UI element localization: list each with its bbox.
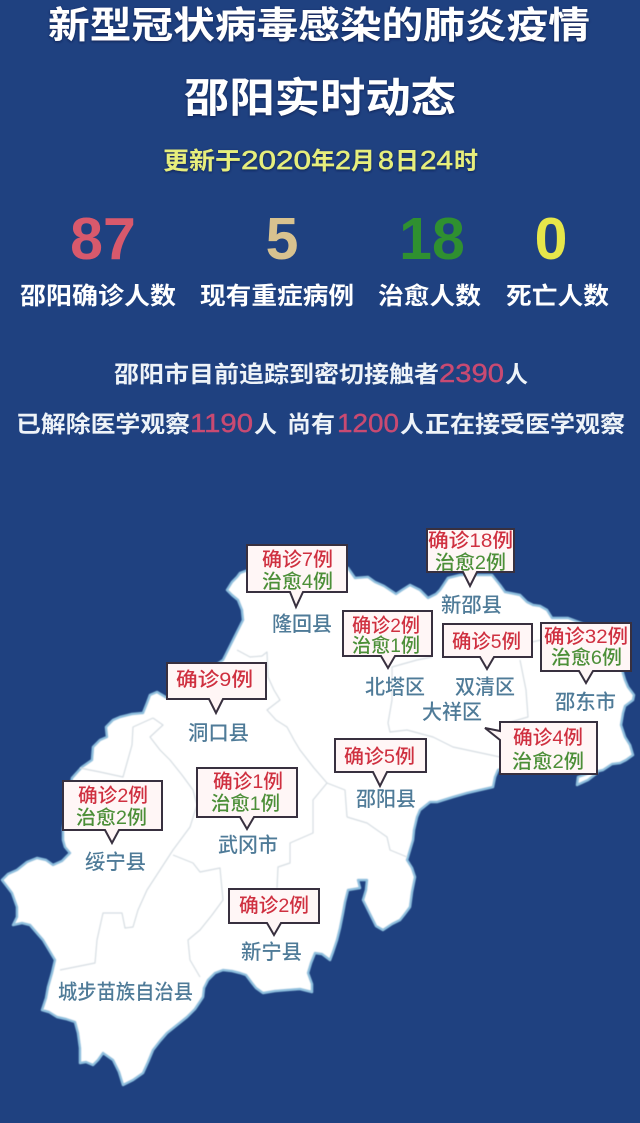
statistics row xyxy=(20,206,609,310)
place: Wugang: 武冈市 xyxy=(218,834,278,857)
update time: 2 xyxy=(335,145,351,175)
callout: Wugang xyxy=(197,768,297,829)
callout: Suining xyxy=(63,781,162,843)
callout: Longhui xyxy=(247,545,347,607)
stat: cured: 18 xyxy=(399,206,465,272)
update time xyxy=(163,145,478,175)
stat: confirmed xyxy=(20,206,176,310)
stat: severe: 5 xyxy=(266,206,298,272)
callout: Suining: 治愈2例 xyxy=(76,807,147,829)
stat: confirmed: 邵阳确诊人数 xyxy=(20,283,176,310)
callout: Xinning xyxy=(229,889,319,935)
contacts line 2: 1190 xyxy=(190,408,253,438)
callout: Xinshao: 治愈2例 xyxy=(435,552,506,574)
callout: Dongkou xyxy=(167,663,266,713)
stat: deaths: 0 xyxy=(535,206,567,272)
contacts line 2 xyxy=(16,408,625,438)
contacts line 2: 人 xyxy=(400,411,424,437)
callout: Shaoyang county: 确诊5例 xyxy=(344,746,415,768)
place: Dongkou: 洞口县 xyxy=(188,722,249,745)
callout: Xinning: 确诊2例 xyxy=(239,895,309,917)
callout: Shaodong xyxy=(541,623,631,683)
callout: Xinshao xyxy=(427,529,514,586)
callout: Suining: 确诊2例 xyxy=(78,785,148,807)
contacts line 1 xyxy=(114,358,528,388)
place: Shuangqing: 双清区 xyxy=(455,676,515,699)
place: Beita: 北塔区 xyxy=(365,676,425,699)
place: Longhui: 隆回县 xyxy=(272,613,332,636)
map of Shaoyang xyxy=(2,529,634,1085)
close contacts text xyxy=(16,358,625,438)
map outline xyxy=(2,565,634,1085)
callout: Daxiang xyxy=(485,722,597,774)
callout: Shuangqing xyxy=(443,624,532,669)
place: Xinning: 新宁县 xyxy=(241,941,302,964)
header text block xyxy=(48,5,590,175)
title line 2: 邵阳实时动态 xyxy=(184,75,456,121)
callout: Longhui: 治愈4例 xyxy=(262,571,333,593)
contacts line 1: 2390 xyxy=(439,358,504,388)
place: Xinshao: 新邵县 xyxy=(441,594,502,617)
stat: cured xyxy=(378,206,481,310)
callout: Daxiang: 治愈2例 xyxy=(512,751,584,773)
stat: severe: 现有重症病例 xyxy=(200,283,354,310)
update time: 8 xyxy=(378,145,394,175)
update time: 月 xyxy=(351,148,375,175)
callout: Shaodong: 治愈6例 xyxy=(551,647,622,669)
contacts line 1: 人 xyxy=(505,361,528,387)
stat: deaths: 死亡人数 xyxy=(506,283,609,310)
update time: 24 xyxy=(420,145,453,175)
callout: Beita: 确诊2例 xyxy=(352,615,420,637)
callout: Beita: 治愈1例 xyxy=(352,635,420,657)
callout: Longhui: 确诊7例 xyxy=(262,549,333,571)
title line 1: 新型冠状病毒感染的肺炎疫情 xyxy=(48,5,590,46)
district borders xyxy=(60,640,541,977)
stat: confirmed: 87 xyxy=(70,206,136,272)
contacts line 2: 已解除医学观察 xyxy=(16,411,190,437)
update time: 日 xyxy=(395,148,419,175)
update time: 时 xyxy=(454,148,478,175)
update time: 2020 xyxy=(241,145,311,175)
callout: Beita xyxy=(343,611,432,668)
stat: deaths xyxy=(506,206,609,310)
place: Suining: 绥宁县 xyxy=(85,851,146,874)
contacts line 2: 正在接受医学观察 xyxy=(425,411,625,437)
contacts line 2: 1200 xyxy=(337,408,399,438)
callout: Shaodong: 确诊32例 xyxy=(544,626,628,648)
callout: Wugang: 治愈1例 xyxy=(211,793,280,815)
callout: Daxiang: 确诊4例 xyxy=(513,727,583,749)
callout: Shaoyang county xyxy=(335,739,426,786)
callouts xyxy=(63,529,631,935)
contacts line 1: 邵阳市目前追踪到密切接触者 xyxy=(114,361,439,387)
contacts line 2: 尚有 xyxy=(287,411,335,437)
stat: cured: 治愈人数 xyxy=(378,282,481,310)
callout: Shuangqing: 确诊5例 xyxy=(452,631,521,653)
callout: Xinshao: 确诊18例 xyxy=(428,530,513,552)
callout: Wugang: 确诊1例 xyxy=(213,771,283,793)
place names xyxy=(58,594,616,1004)
callout: Dongkou: 确诊9例 xyxy=(176,669,253,691)
place: Shaodong: 邵东市 xyxy=(555,691,616,714)
stat: severe xyxy=(200,206,354,310)
contacts line 2: 人 xyxy=(254,411,277,437)
update time: 年 xyxy=(311,148,335,175)
place: Shaoyang county: 邵阳县 xyxy=(356,788,416,811)
place: Chengbu: 城步苗族自治县 xyxy=(58,981,193,1004)
update time: 更新于 xyxy=(163,148,241,175)
place: Daxiang: 大祥区 xyxy=(422,701,482,724)
